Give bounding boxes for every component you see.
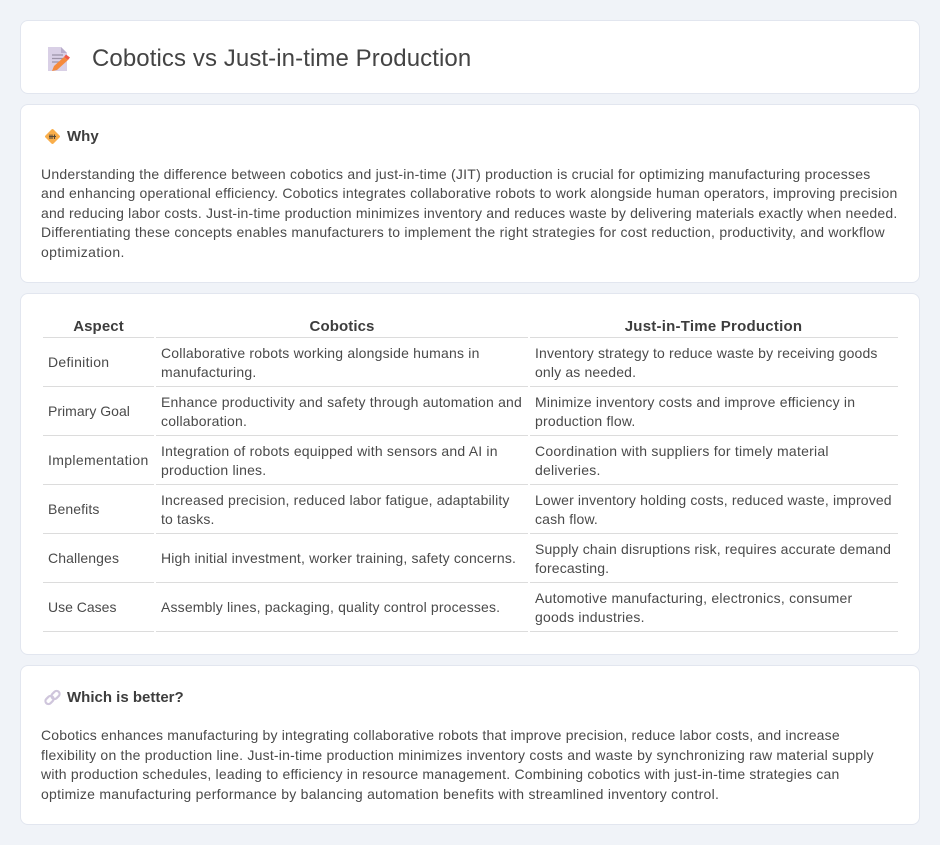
row: benefits: Increased precision, reduced labor fatigue, adaptability — [161, 492, 510, 508]
row: definition: only as needed. — [535, 364, 636, 380]
row: primary goal: Minimize inventory costs and improve efficiency in — [535, 394, 855, 410]
why text block: optimization. — [41, 244, 125, 260]
why text block: Differentiating these concepts enables manufacturers to implement the right strategies for cost reduction, productivity, and workflow — [41, 224, 885, 240]
row: definition: Inventory strategy to reduce waste by receiving goods — [535, 344, 878, 360]
why text block: and reducing labor costs. Just-in-time production minimizes inventory and reduces waste by delivering materials exactly when needed. — [41, 205, 897, 221]
row: challenges — [48, 540, 891, 576]
row: implementation: Implementation — [48, 452, 149, 468]
heading: which is better: Which is better? — [67, 689, 184, 706]
table header row — [73, 318, 802, 335]
panel: which is better — [20, 665, 920, 825]
row: implementation: deliveries. — [535, 462, 601, 478]
row: challenges: Challenges — [48, 550, 119, 566]
row: use cases: Assembly lines, packaging, quality control processes. — [161, 598, 500, 614]
row: definition: Definition — [48, 354, 109, 370]
row: use cases: Use Cases — [48, 598, 116, 614]
row: implementation: production lines. — [161, 462, 266, 478]
panel: title header — [20, 20, 920, 94]
which is better text block: with production schedules, leading to efficiency in resource management. Combining cobotics with just-in-time strategies can — [41, 766, 840, 782]
icon: chain link — [44, 690, 61, 706]
icon: document with pencil — [48, 47, 70, 71]
row: challenges: Supply chain disruptions risk, requires accurate demand — [535, 540, 891, 556]
row: definition: manufacturing. — [161, 364, 256, 380]
row: benefits: Lower inventory holding costs, reduced waste, improved — [535, 492, 892, 508]
icon: warning diamond — [45, 129, 60, 144]
heading: why: Why — [67, 128, 99, 145]
row: definition — [48, 344, 878, 380]
row: implementation: Coordination with suppliers for timely material — [535, 442, 829, 458]
row: benefits — [48, 492, 892, 527]
row: primary goal: Enhance productivity and safety through automation and — [161, 394, 522, 410]
table header row: Cobotics — [310, 318, 374, 335]
why text block: Understanding the difference between cobotics and just-in-time (JIT) production is crucial for optimizing manufacturing processes — [41, 166, 870, 182]
why text block — [41, 166, 897, 260]
why text block: and enhancing operational efficiency. Cobotics integrates collaborative robots to work alongside human operators, improving precision — [41, 185, 897, 201]
row: use cases: goods industries. — [535, 609, 645, 625]
row: primary goal: collaboration. — [161, 413, 247, 429]
row: benefits: Benefits — [48, 500, 100, 516]
row: use cases: Automotive manufacturing, electronics, consumer — [535, 590, 852, 606]
row: primary goal: production flow. — [535, 413, 635, 429]
row: benefits: cash flow. — [535, 511, 598, 527]
row: challenges: forecasting. — [535, 560, 609, 576]
panel: comparison table — [20, 293, 920, 655]
row: implementation: Integration of robots equipped with sensors and AI in — [161, 442, 498, 458]
which is better text block: Cobotics enhances manufacturing by integrating collaborative robots that improve precision, reduce labor costs, and increase — [41, 727, 840, 743]
which is better text block: optimize manufacturing performance by balancing automation benefits with streamlined inventory control. — [41, 786, 719, 802]
row: definition: Collaborative robots working alongside humans in — [161, 344, 480, 360]
row: primary goal: Primary Goal — [48, 402, 130, 418]
row: benefits: to tasks. — [161, 511, 215, 527]
table header row: Just-in-Time Production — [625, 318, 802, 335]
row: challenges: High initial investment, worker training, safety concerns. — [161, 550, 516, 566]
table header row: Aspect — [73, 318, 124, 335]
which is better text block — [41, 727, 874, 802]
row: primary goal — [48, 394, 855, 429]
title: Cobotics vs Just-in-time Production — [92, 45, 471, 72]
which is better text block: flexibility on the production line. Just-in-time production minimizes inventory costs and waste by synchronizing raw material supply — [41, 747, 874, 763]
panel: why — [20, 104, 920, 283]
row: implementation — [48, 442, 829, 478]
row: use cases — [48, 590, 852, 625]
